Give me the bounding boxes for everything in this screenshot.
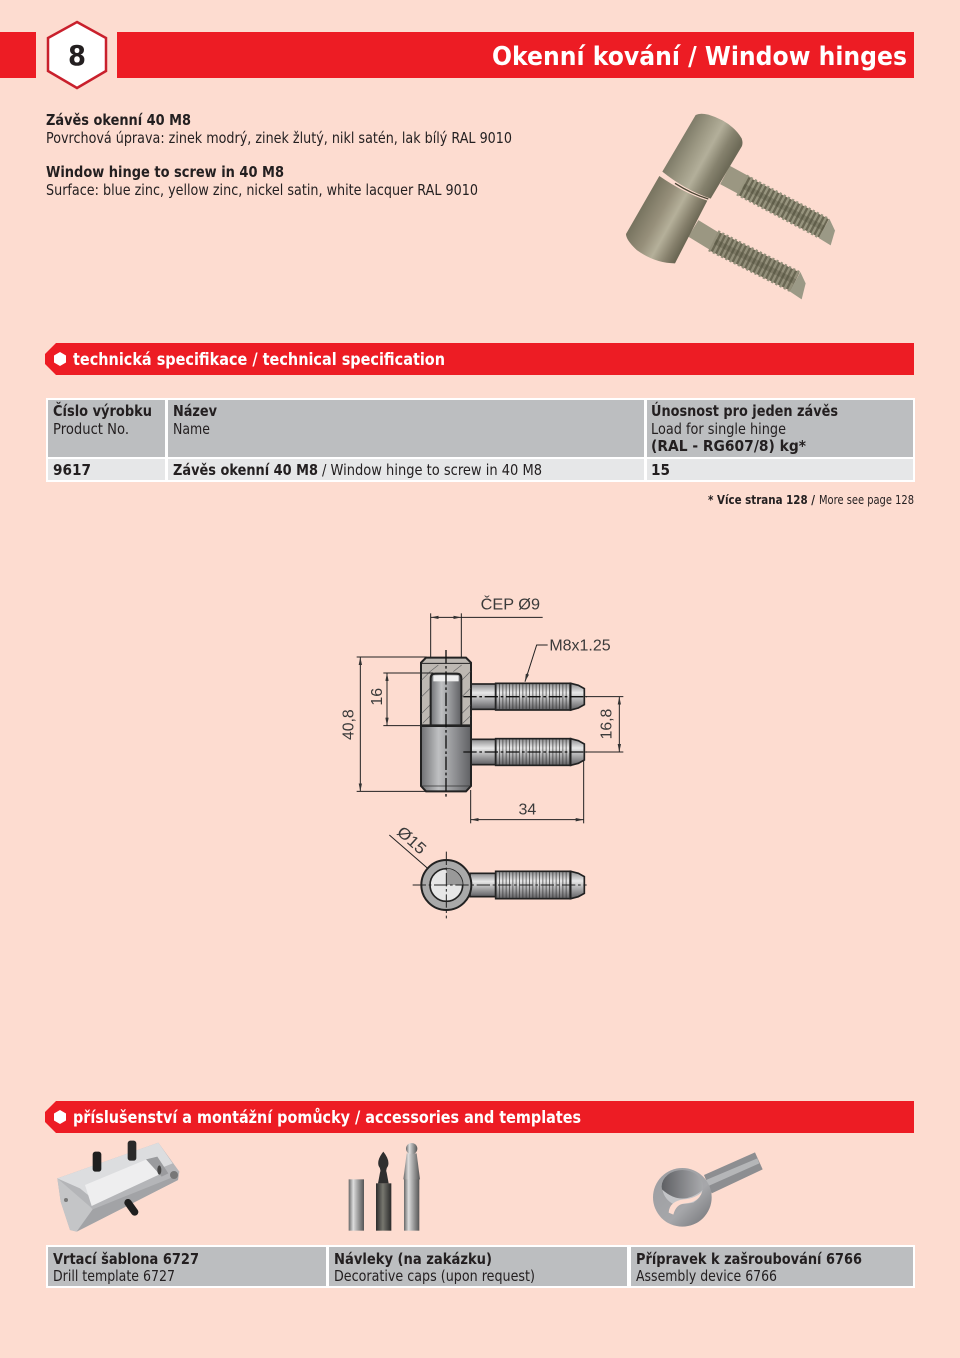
product description	[46, 111, 512, 199]
end view screw	[470, 871, 584, 899]
cap: ball	[403, 1143, 420, 1231]
upper barrel	[662, 114, 742, 199]
cap: black	[376, 1152, 391, 1231]
accessories table: Assembly device 6766	[636, 1267, 777, 1285]
photo: decorative caps	[349, 1143, 420, 1231]
centre lines	[446, 650, 587, 797]
specification table	[46, 398, 915, 482]
accessories table: Návleky (na zakázku)	[334, 1250, 492, 1268]
specification table: (RAL - RG607/8) kg*	[651, 437, 806, 455]
accessories table: Decorative caps (upon request)	[334, 1267, 535, 1285]
dimension labels: 16,8	[599, 709, 616, 739]
specification table: Číslo výrobku	[53, 401, 152, 420]
specification table: Load for single hinge	[651, 420, 786, 438]
dimension labels: 16	[369, 688, 386, 706]
icon: hexagon bullet	[54, 1110, 66, 1124]
accessories table: Vrtací šablona 6727	[53, 1250, 199, 1268]
title: Okenní kování / Window hinges	[492, 42, 907, 72]
photo: window hinge	[626, 114, 835, 299]
section bar: technical specification	[45, 343, 914, 375]
dimension labels: M8x1.25	[549, 638, 611, 655]
specification table: 15	[651, 461, 670, 479]
specification table: Název	[173, 402, 217, 420]
product description: Závěs okenní 40 M8	[46, 111, 191, 129]
cap: plain	[349, 1179, 364, 1231]
accessories table	[46, 1245, 915, 1288]
section bar: accessories and templates	[45, 1101, 914, 1133]
dimension labels: 34	[518, 801, 536, 818]
lower screw	[693, 228, 806, 299]
photo: drill template	[57, 1141, 179, 1232]
header band	[0, 22, 914, 88]
upper screw	[725, 175, 835, 245]
product description: Window hinge to screw in 40 M8	[46, 163, 284, 181]
chapter number badge	[48, 22, 106, 88]
specification table: Únosnost pro jeden závěs	[651, 401, 838, 420]
specification table: 9617	[53, 461, 91, 479]
accessories table: Drill template 6727	[53, 1267, 175, 1285]
side view upper barrel (section)	[421, 658, 471, 726]
side view bottom screw	[471, 739, 584, 765]
specification table: Product No.	[53, 420, 129, 438]
dimension labels: ČEP Ø9	[481, 594, 540, 613]
icon: hexagon bullet	[54, 352, 66, 366]
specification table: Name	[173, 420, 210, 438]
lower barrel	[626, 176, 707, 263]
side view lower barrel	[421, 726, 471, 791]
footnote	[708, 493, 914, 507]
product description: Povrchová úprava: zinek modrý, zinek žlutý, nikl satén, lak bílý RAL 9010	[46, 129, 512, 147]
technical drawing	[340, 594, 623, 918]
accessories table: Přípravek k zašroubování 6766	[636, 1250, 862, 1268]
specification table: Závěs okenní 40 M8	[173, 461, 318, 479]
footnote: * Více strana 128 /	[708, 493, 816, 507]
side view top screw	[471, 683, 584, 710]
dimension labels: 40,8	[340, 709, 357, 740]
barrel joint	[675, 183, 708, 199]
chapter number badge: 8	[68, 39, 86, 72]
product description: Surface: blue zinc, yellow zinc, nickel satin, white lacquer RAL 9010	[46, 181, 478, 199]
end view ring	[413, 852, 587, 918]
photo: assembly device	[653, 1152, 763, 1227]
footnote: More see page 128	[819, 493, 914, 507]
section bar: technical specification: technická specifikace / technical specification	[73, 350, 445, 370]
section bar: accessories and templates: příslušenství a montážní pomůcky / accessories and templates	[73, 1106, 581, 1128]
dimension lines	[357, 613, 623, 899]
dimension labels: Ø15	[393, 824, 429, 858]
dimension labels	[340, 594, 616, 858]
specification table: / Window hinge to screw in 40 M8	[322, 461, 542, 479]
